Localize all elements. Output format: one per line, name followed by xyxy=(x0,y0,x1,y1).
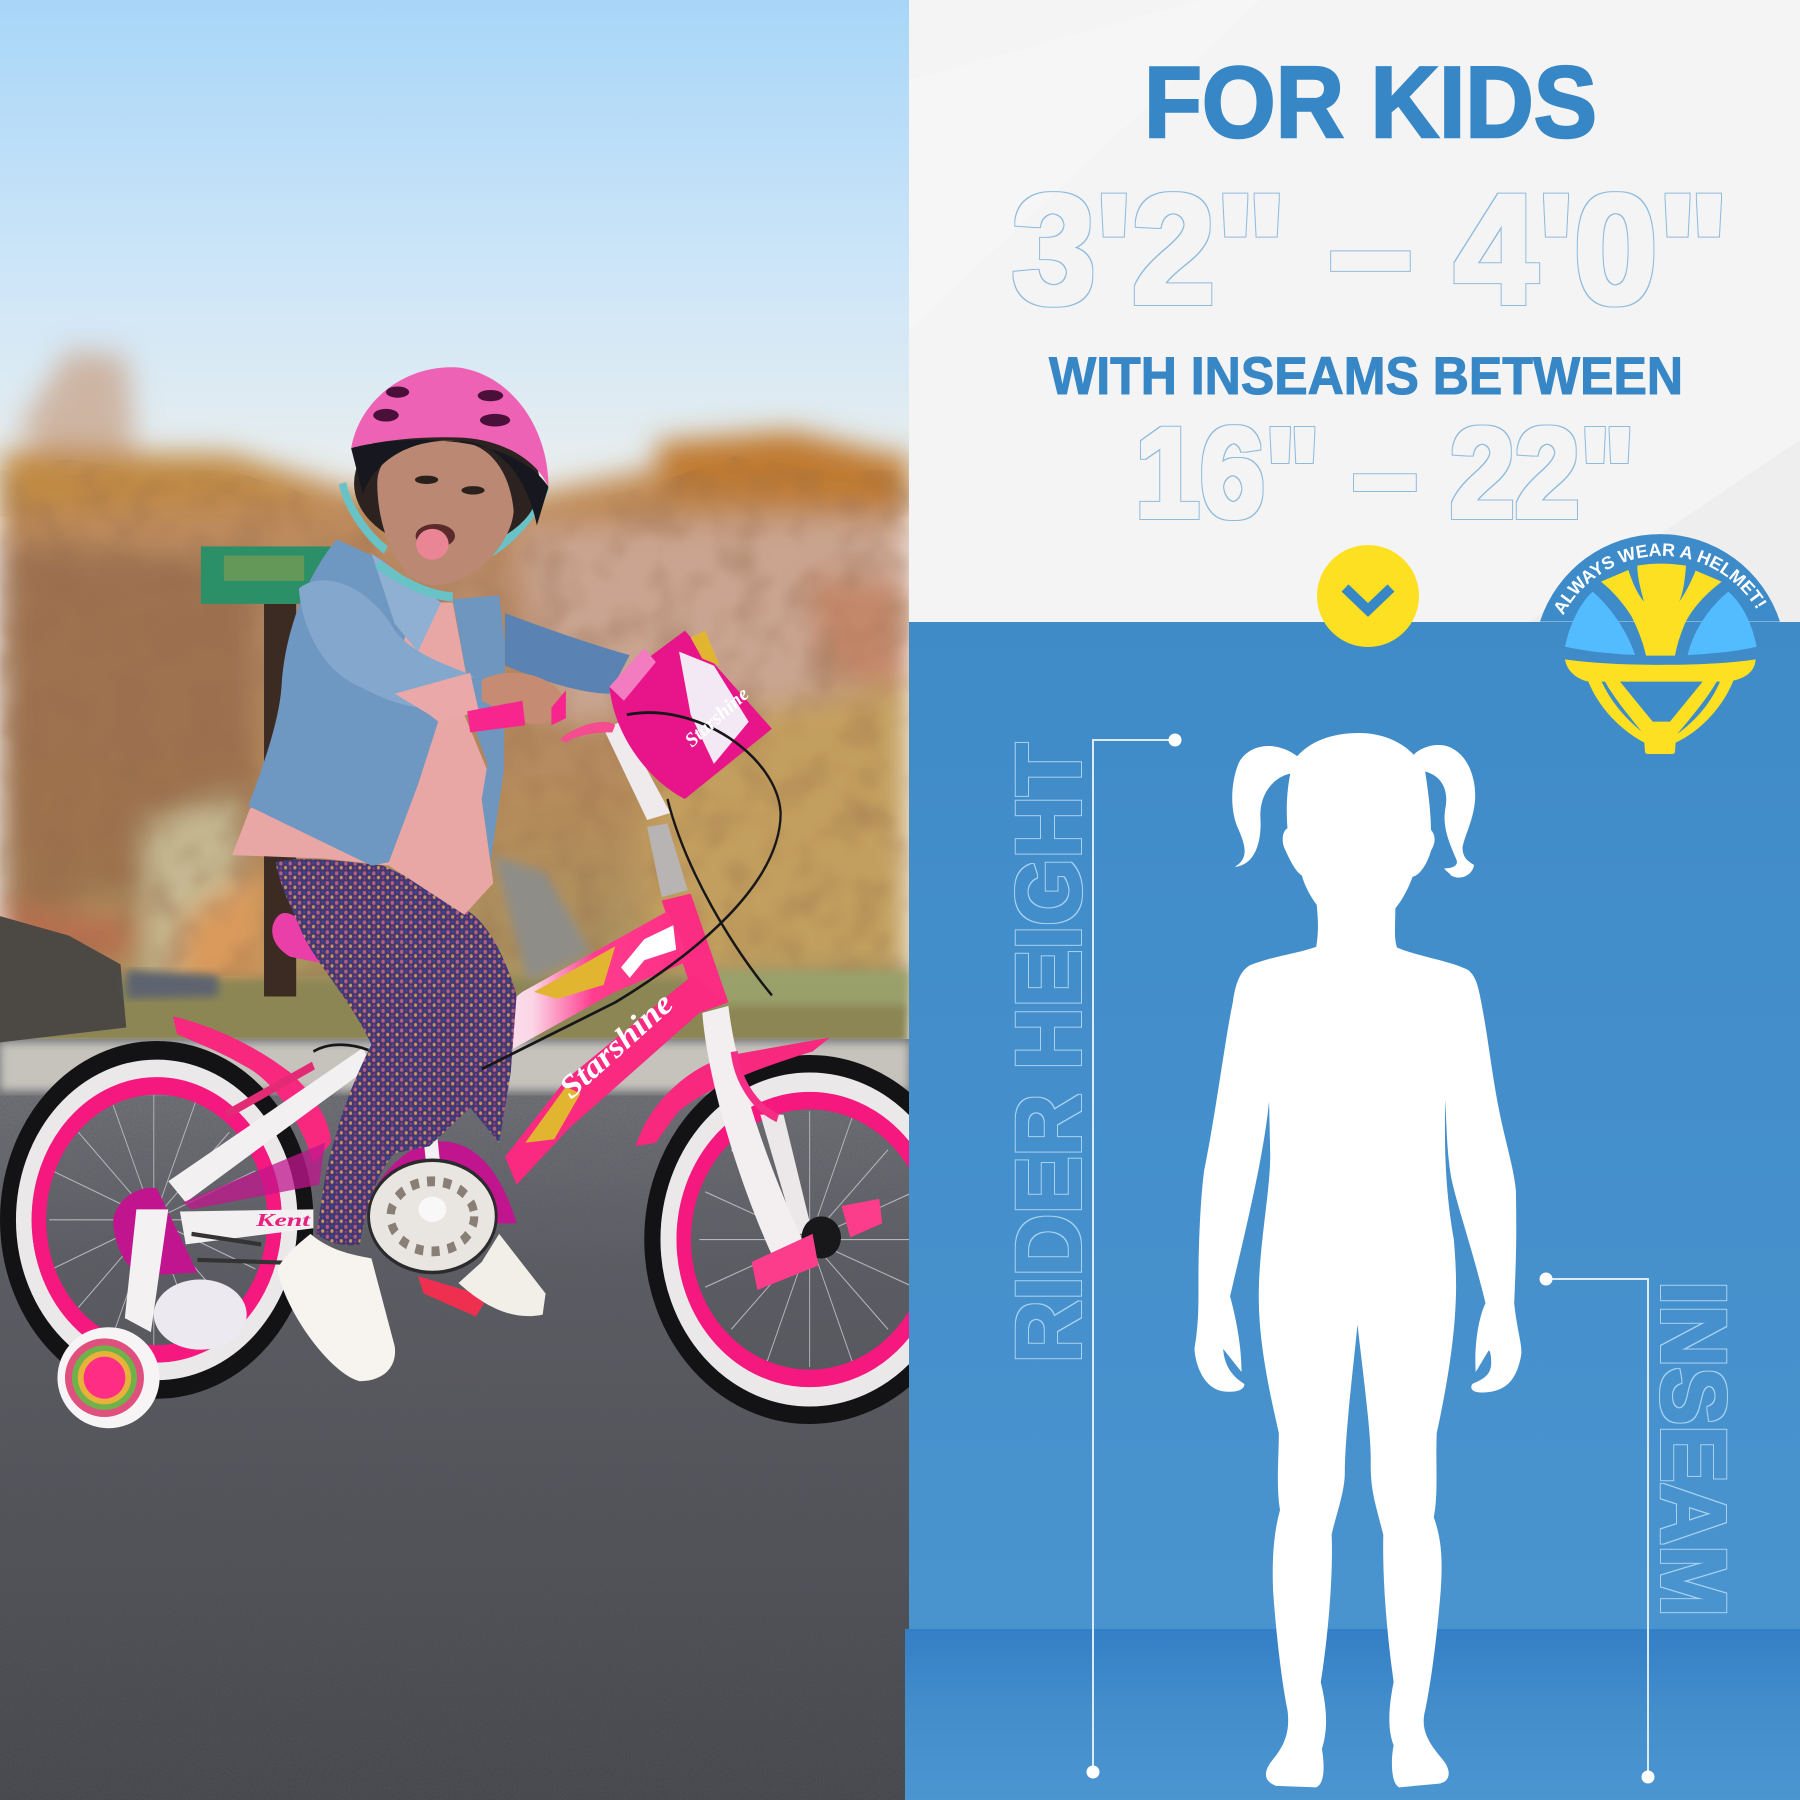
leggings xyxy=(276,859,517,1245)
rainbow decal on down tube xyxy=(525,1087,580,1143)
denim jacket xyxy=(248,539,630,866)
icon: always wear a helmet badge xyxy=(1540,534,1780,754)
bicycle xyxy=(8,722,967,1428)
eyes xyxy=(415,476,485,495)
face xyxy=(377,441,514,585)
pedals xyxy=(418,1276,484,1317)
head tube and stem xyxy=(604,722,728,1013)
icon: yellow chevron button xyxy=(1317,545,1419,647)
sky xyxy=(0,0,909,517)
rear wheel xyxy=(8,1051,305,1389)
panel: blue measurement area xyxy=(909,622,1800,1800)
icon: always wear a helmet badge: ALWAYS WEAR A HELMET! xyxy=(1554,543,1767,616)
rider height bracket xyxy=(1086,734,1182,1778)
panel: heading area background xyxy=(909,0,1800,625)
grass xyxy=(29,966,909,1039)
chin strap xyxy=(342,483,546,597)
panel: photo of child on bicycle xyxy=(0,0,967,1800)
handlebar grip xyxy=(467,690,566,732)
tongue xyxy=(416,524,455,560)
seat stay xyxy=(168,1048,371,1202)
background trees xyxy=(0,350,909,1010)
front brake xyxy=(734,1052,778,1118)
hand xyxy=(482,673,566,724)
fork xyxy=(760,1115,813,1234)
rear brake xyxy=(226,1066,313,1115)
brake cables xyxy=(313,713,781,1069)
chain stay lettering: Kent: Kent xyxy=(254,1210,312,1230)
frame lettering: Starshine: Starshine xyxy=(552,985,680,1105)
front wheel xyxy=(644,1055,909,1424)
front hub and pegs xyxy=(752,1199,882,1290)
child rider xyxy=(232,367,781,1381)
handlebar bag xyxy=(609,631,772,799)
outlined inseam range: 16" – 22" xyxy=(1135,402,1635,545)
chain stay xyxy=(180,1209,313,1244)
training wheel xyxy=(57,1209,247,1428)
floor band xyxy=(905,1629,1800,1800)
bag lettering: Starshine: Starshine xyxy=(681,683,753,752)
heading: FOR KIDS: FOR KIDS xyxy=(1144,47,1597,159)
rocks xyxy=(0,855,591,1042)
chain xyxy=(191,1232,283,1265)
top tube xyxy=(447,911,691,1076)
chainring xyxy=(369,1129,496,1272)
hair xyxy=(354,417,540,550)
saddle xyxy=(272,913,325,964)
chain guard xyxy=(113,1141,517,1276)
rear fender xyxy=(173,1016,331,1164)
inseam bracket xyxy=(1540,1272,1654,1784)
child silhouette xyxy=(1194,733,1521,1787)
road sign xyxy=(201,546,333,996)
sleeve cuff xyxy=(395,673,479,722)
down tube xyxy=(505,974,726,1185)
road xyxy=(0,1039,909,1800)
rider height label: RIDER HEIGHT xyxy=(998,743,1100,1363)
inseam label: INSEAM xyxy=(1642,1281,1744,1617)
subheading: with inseams between: WITH INSEAMS BETWEEN xyxy=(1049,347,1683,406)
shoes xyxy=(459,1234,546,1316)
helmet xyxy=(351,367,548,487)
rainbow decal on top tube xyxy=(534,946,615,999)
shirt xyxy=(232,603,493,915)
front fender xyxy=(636,1037,830,1146)
outlined height range: 3'2" – 4'0" xyxy=(1012,163,1729,337)
unicorn decal xyxy=(621,925,676,978)
brake lever xyxy=(560,722,615,743)
